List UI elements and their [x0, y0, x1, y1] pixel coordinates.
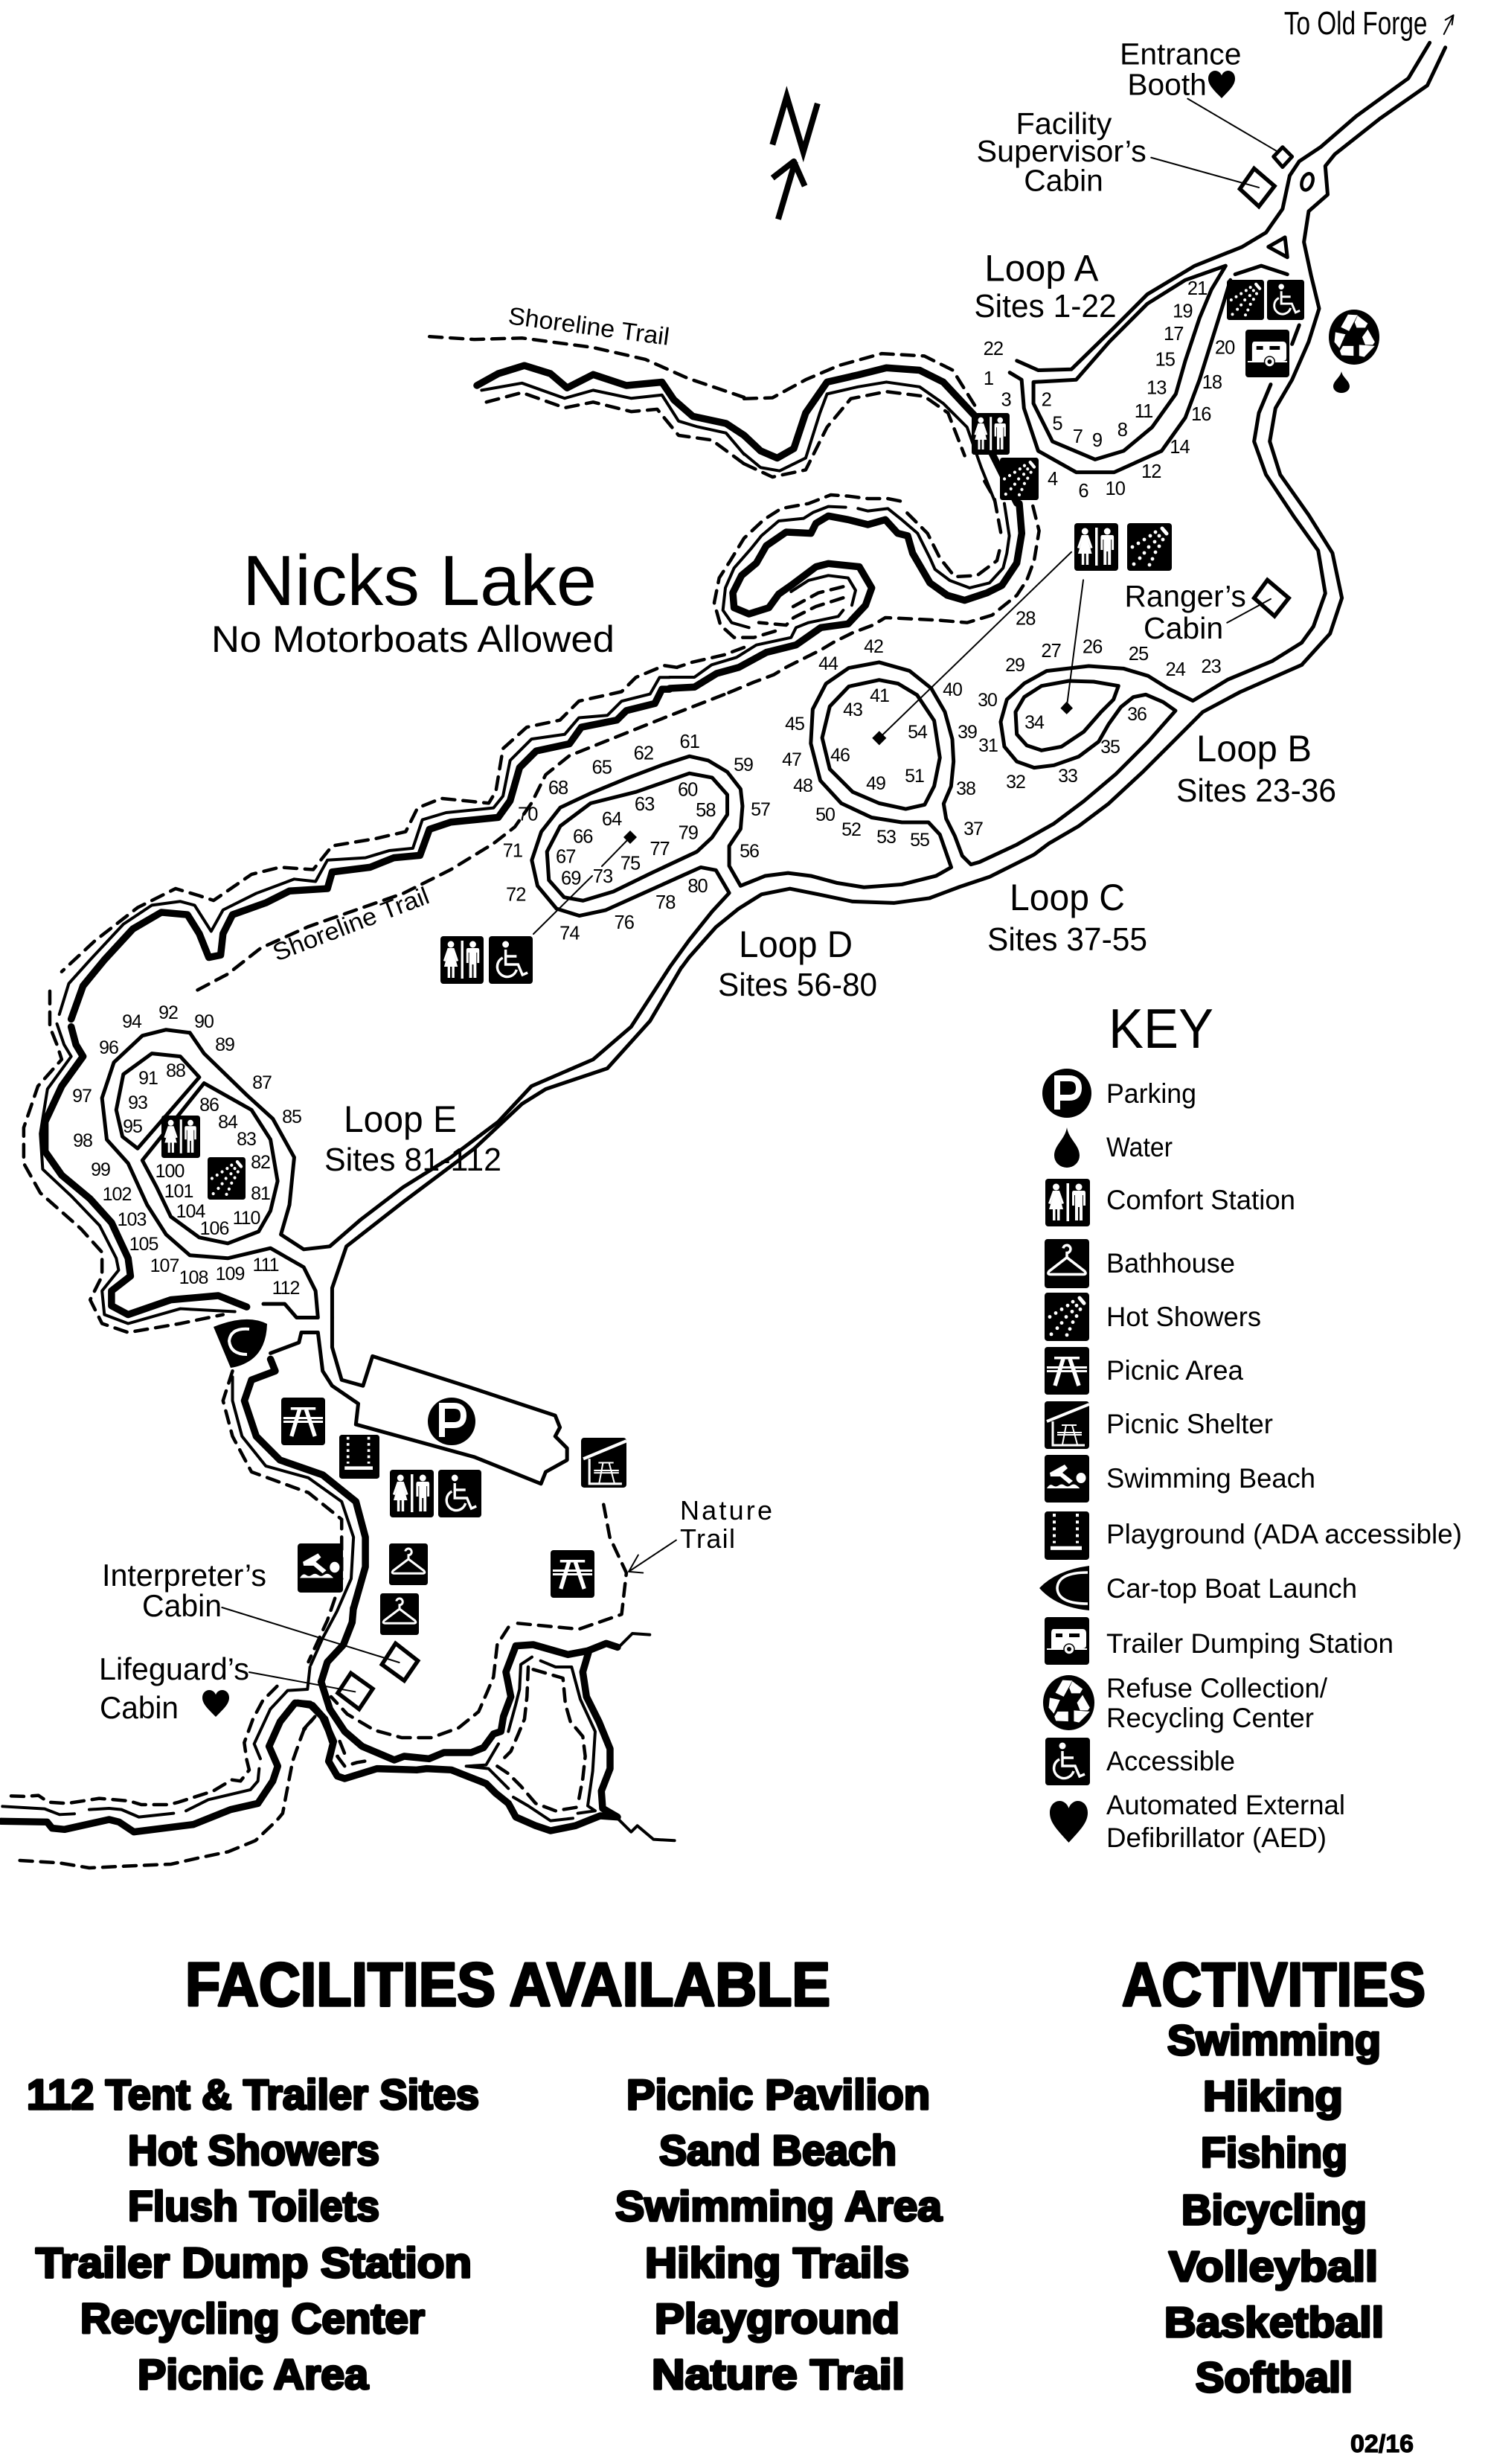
site numbers: Loops A, B and C north: 16	[1191, 404, 1211, 425]
subtitle: No Motorboats Allowed: No Motorboats Allowed	[211, 618, 615, 660]
site numbers: Loop D: 76	[614, 912, 635, 933]
list: activities: Fishing	[1201, 2129, 1347, 2177]
label: Sites 81-112: Sites 81-112	[324, 1142, 501, 1178]
compass: north arrow	[772, 96, 818, 220]
site numbers: Loops A, B and C north: 17	[1164, 324, 1183, 345]
label: Loop E: Loop E	[344, 1098, 457, 1140]
site numbers: Loops B and C: 55	[910, 830, 929, 851]
list: activities: Volleyball	[1169, 2243, 1378, 2291]
site numbers: Loop E: 112	[272, 1278, 300, 1299]
icon: entrance booth AED heart	[1208, 71, 1235, 98]
site numbers: Loops A, B and C north: 2	[1042, 390, 1051, 411]
key item: Picnic Shelter: Picnic Shelter	[1106, 1409, 1273, 1439]
site numbers: Loop E: 89	[215, 1034, 234, 1055]
icon: bathhouse south	[380, 1593, 419, 1635]
site numbers: Loops B and C: 56	[740, 841, 759, 862]
site numbers: Loop E: 84	[218, 1112, 238, 1133]
key item: Comfort Station	[1045, 1179, 1295, 1226]
site numbers: Loop D: 74	[559, 924, 580, 944]
site numbers: Loop E: 99	[91, 1159, 110, 1180]
site numbers: Loop E: 87	[252, 1072, 272, 1093]
site numbers: Loops A, B and C north: 3	[1001, 390, 1011, 411]
site numbers: Loop E: 102	[103, 1184, 131, 1205]
site numbers: Loop D: 61	[679, 732, 699, 752]
key item: Parking	[1042, 1069, 1196, 1118]
list: activities: Bicycling	[1181, 2186, 1367, 2234]
list: facilities column two: Nature Trail	[652, 2351, 905, 2399]
site numbers: Loop D: 63	[635, 794, 655, 815]
key item: Trailer Dumping Station	[1045, 1617, 1394, 1665]
key item: AED: Defibrillator (AED)	[1106, 1823, 1327, 1853]
key item: Bathhouse: Bathhouse	[1106, 1248, 1235, 1279]
list: activities: Hiking	[1203, 2073, 1343, 2120]
icon: parking	[428, 1398, 475, 1445]
icon: lifeguard cabin AED heart	[202, 1690, 229, 1717]
site numbers: Loops B and C: 36	[1127, 704, 1147, 725]
key item: Parking: Parking	[1106, 1078, 1196, 1109]
icon: Loop E comfort station	[161, 1116, 200, 1158]
site numbers: Loops B and C: 48	[793, 775, 812, 796]
labels: north-east features: Loop A	[984, 248, 1099, 289]
site numbers: Loops B and C: 41	[870, 685, 889, 706]
site numbers: Loops A, B and C north: 13	[1147, 378, 1167, 399]
label: Interpreter's Cabin: Cabin	[142, 1588, 222, 1623]
label: Lifeguard's Cabin	[99, 1651, 249, 1725]
site numbers: Loops A, B and C north: 12	[1141, 461, 1161, 482]
site numbers: Loops A, B and C north: 28	[1016, 609, 1036, 630]
labels: north-east features: Entrance	[1120, 37, 1241, 71]
list: facilities column one: Trailer Dump Station	[36, 2239, 472, 2287]
heading: Facilities Available: FACILITIES AVAILABLE	[185, 1950, 830, 2019]
heading: KEY: KEY	[1109, 997, 1213, 1060]
icon: Loop B C hot showers	[1127, 523, 1172, 571]
site numbers: Loops A, B and C north: 27	[1041, 641, 1061, 662]
site numbers: Loops A, B and C north: 18	[1202, 372, 1222, 393]
site numbers: Loop D: 71	[503, 841, 522, 862]
site numbers: Loops B and C: 50	[815, 804, 835, 825]
list: facilities column one	[27, 2071, 479, 2399]
site numbers: Loops A, B and C north: 15	[1155, 349, 1176, 370]
site numbers: Loop D: 80	[687, 876, 708, 897]
icon: Loop A hot showers west	[1000, 458, 1039, 500]
panel: map key	[1039, 997, 1462, 1853]
site numbers: Loop E: 109	[216, 1264, 244, 1284]
site numbers: Loop D: 72	[506, 884, 526, 905]
site numbers: Loop E: 107	[150, 1255, 179, 1276]
list: activities: Swimming	[1167, 2017, 1381, 2064]
site numbers: Loops A, B and C north: 24	[1166, 659, 1186, 680]
site numbers: Loop D: 70	[518, 804, 538, 825]
site numbers: Loops A, B and C north	[984, 278, 1235, 680]
site numbers: Loops A, B and C north: 25	[1129, 644, 1149, 665]
key item: Water	[1054, 1127, 1173, 1168]
key item: Refuse Collection / Recycling Center	[1043, 1673, 1328, 1733]
label: Loop D: Loop D	[739, 924, 853, 965]
icon: bathhouse north	[389, 1543, 428, 1585]
site numbers: Loop D: 66	[573, 827, 593, 848]
site numbers: Loops B and C: 33	[1058, 766, 1077, 787]
label: Shoreline Trail lower: Shoreline Trail	[269, 881, 433, 967]
site numbers: Loop E: 96	[99, 1037, 118, 1058]
site numbers: Loop D: 73	[593, 866, 613, 887]
icon: Loop B C comfort station	[1074, 523, 1118, 571]
labels: north-east features: To Old Forge	[1284, 6, 1427, 42]
icon: picnic shelter	[581, 1438, 626, 1488]
site numbers: Loop D: 60	[678, 779, 698, 800]
site numbers: Loop D: 64	[602, 809, 622, 830]
site numbers: Loop D: 67	[556, 846, 575, 867]
key item: Bathhouse	[1045, 1239, 1235, 1288]
road: entrance road and Loop A	[1010, 42, 1446, 665]
label: Loop B: Loop B	[1196, 728, 1312, 769]
key item: AED: Automated External	[1106, 1790, 1345, 1820]
list: facilities column two: Picnic Pavilion	[626, 2071, 930, 2119]
site numbers: Loop D: 79	[679, 822, 698, 843]
site numbers: Loop E: 103	[118, 1209, 146, 1230]
label: Lifeguard's Cabin: Cabin	[100, 1690, 179, 1725]
icon: Loop D accessible	[489, 936, 533, 984]
site numbers: Loops A, B and C north: 19	[1173, 301, 1193, 321]
site numbers: Loop E: 106	[200, 1218, 228, 1239]
icon: playground	[339, 1435, 379, 1479]
site numbers: Loops B and C	[734, 636, 1147, 862]
site numbers: Loops A, B and C north: 11	[1135, 401, 1152, 422]
site numbers: Loop E: 97	[72, 1086, 92, 1107]
site numbers: Loop E: 90	[194, 1011, 214, 1032]
label: Nature Trail	[680, 1495, 772, 1554]
site numbers: Loops B and C: 40	[943, 679, 962, 700]
label: Sites 23-36: Sites 23-36	[1176, 772, 1336, 809]
icon: Loop D comfort station	[440, 936, 484, 984]
site numbers: Loop D: 77	[650, 839, 670, 860]
label: Interpreter's Cabin	[102, 1558, 266, 1623]
site numbers: Loops B and C: 42	[864, 636, 883, 657]
key item: Trailer Dumping Station: Trailer Dumping Station	[1106, 1628, 1394, 1659]
label: Shoreline Trail upper: Shoreline Trail	[507, 301, 671, 351]
key item: Picnic Area	[1045, 1347, 1243, 1395]
shoreline of Nicks Lake	[1, 365, 1022, 1840]
site numbers: Loops A, B and C north: 21	[1187, 278, 1207, 299]
labels: north-east features	[872, 6, 1454, 745]
labels: north-east features: Supervisor’s	[977, 134, 1147, 168]
site numbers: Loop D: 65	[592, 757, 612, 778]
icon: trailer dump station	[1245, 330, 1289, 377]
site numbers: Loops A, B and C north: 8	[1117, 420, 1128, 441]
site numbers: Loops B and C: 35	[1100, 737, 1120, 758]
site numbers: Loops A, B and C north: 20	[1215, 338, 1235, 359]
site numbers: Loops A, B and C north: 6	[1078, 481, 1088, 502]
icon: Loop E hot showers	[208, 1157, 246, 1200]
site numbers: Loop E: 86	[199, 1095, 219, 1116]
site numbers: Loop E	[72, 1002, 301, 1299]
site numbers: Loops B and C: 49	[866, 773, 885, 794]
labels: north-east features: Cabin	[1024, 163, 1103, 197]
key item: Refuse Collection / Recycling Center: Recycling Center	[1106, 1703, 1314, 1733]
leaders: cabins and nature trail	[222, 1540, 676, 1709]
site numbers: Loop E: 81	[251, 1183, 270, 1204]
labels: north-east features: Booth	[1127, 68, 1207, 102]
title: Nicks Lake: Nicks Lake	[243, 541, 597, 621]
site numbers: Loop E: 104	[176, 1201, 205, 1222]
icon: Loop A accessible	[1267, 280, 1304, 320]
key item: AED	[1050, 1790, 1345, 1853]
leader: Loop D comfort station	[533, 831, 637, 934]
site numbers: Loops B and C: 46	[830, 745, 850, 766]
icon: Loop A comfort station	[972, 413, 1010, 455]
site numbers: Loop E: 92	[158, 1002, 178, 1023]
key item: Refuse Collection / Recycling Center: Refuse Collection/	[1106, 1673, 1328, 1703]
list: facilities column two	[615, 2071, 943, 2399]
road: Loop C and Loop D	[532, 662, 952, 967]
key item: Playground: Playground (ADA accessible)	[1106, 1519, 1462, 1549]
icon: recycling center	[1329, 310, 1379, 365]
site numbers: Loop E: 108	[179, 1267, 208, 1288]
site numbers: Loop E: 85	[282, 1107, 301, 1127]
label: Interpreter's Cabin: Interpreter’s	[102, 1558, 266, 1593]
site numbers: Loops A, B and C north: 9	[1092, 430, 1102, 451]
list: facilities column one: Flush Toilets	[128, 2183, 379, 2230]
key item: Picnic Shelter	[1045, 1401, 1273, 1449]
key item: Hot Showers: Hot Showers	[1106, 1302, 1261, 1332]
site numbers: Loops B and C: 51	[905, 766, 924, 787]
key item: Car-top Boat Launch	[1039, 1566, 1357, 1610]
list: facilities column one: Hot Showers	[128, 2127, 379, 2175]
list: facilities column two: Playground	[655, 2295, 899, 2343]
site numbers: Loops B and C: 34	[1024, 712, 1045, 733]
site numbers: Loops B and C: 31	[978, 735, 998, 756]
site numbers: Loop D: 58	[696, 800, 716, 821]
site numbers: Loops B and C: 54	[908, 722, 928, 743]
trail: Nature Trail and bottom trail	[20, 1505, 626, 1868]
label: Nature Trail: Nature	[680, 1495, 772, 1526]
list: facilities column two: Hiking Trails	[645, 2239, 909, 2287]
site numbers: Loop E: 105	[129, 1234, 158, 1255]
icon: Loop A hot showers	[1227, 280, 1264, 320]
site numbers: Loops A, B and C north: 5	[1052, 414, 1062, 435]
road: Loop E and parking lot	[102, 967, 682, 1484]
site numbers: Loop E: 93	[128, 1092, 147, 1113]
site numbers: Loops B and C: 45	[785, 714, 804, 735]
list: facilities column one: 112 Tent & Trailer Sites	[27, 2071, 479, 2119]
labels: north-east features: Ranger’s	[1125, 579, 1246, 613]
key item: Comfort Station: Comfort Station	[1106, 1185, 1295, 1215]
site numbers: Loop D: 62	[634, 743, 653, 764]
site numbers: Loop D: 68	[548, 778, 568, 799]
site numbers: Loops B and C: 59	[734, 755, 753, 775]
site numbers: Loop E: 111	[252, 1255, 279, 1276]
site numbers: Loop E: 88	[166, 1060, 185, 1081]
key item: Car-top Boat Launch: Car-top Boat Launch	[1106, 1573, 1357, 1604]
road: Loop B and Loop C east side	[930, 642, 1302, 898]
key item: Swimming Beach: Swimming Beach	[1106, 1463, 1315, 1494]
map: Nicks Lake campground	[1, 6, 1454, 1868]
list: facilities column one: Recycling Center	[80, 2295, 425, 2343]
site numbers: Loops B and C: 30	[978, 690, 997, 711]
labels: north-east features: Sites 1-22	[974, 289, 1117, 324]
site numbers: Loop D: 78	[655, 892, 676, 913]
site numbers: Loops B and C: 47	[782, 749, 801, 770]
site numbers: Loop E: 83	[237, 1129, 256, 1150]
site numbers: Loop E: 94	[122, 1011, 142, 1032]
site numbers: Loops B and C: 38	[956, 778, 975, 799]
icon: day use comfort station	[390, 1470, 434, 1517]
site numbers: Loop E: 100	[155, 1161, 184, 1182]
key item: Swimming Beach	[1045, 1455, 1315, 1503]
labels: north-east features: Cabin	[1144, 611, 1223, 645]
site numbers: Loops B and C: 39	[958, 722, 977, 743]
site numbers: Loop E: 101	[164, 1181, 193, 1202]
site numbers: Loops B and C: 44	[818, 653, 838, 674]
site numbers: Loops A, B and C north: 14	[1170, 437, 1190, 458]
site numbers: Loops A, B and C north: 22	[984, 339, 1003, 359]
site numbers: Loops B and C: 52	[841, 819, 861, 840]
site numbers: Loops B and C: 32	[1006, 772, 1025, 793]
list: activities: Softball	[1196, 2354, 1353, 2401]
label: Nature Trail: Trail	[680, 1523, 735, 1554]
list: activities: Basketball	[1164, 2299, 1384, 2346]
site numbers: Loop E: 110	[233, 1208, 260, 1229]
key item: Playground	[1045, 1511, 1462, 1560]
label: Sites 56-80: Sites 56-80	[718, 967, 877, 1003]
icon: car-top boat launch	[214, 1319, 267, 1368]
site numbers: Loops B and C: 43	[843, 700, 862, 720]
site numbers: Loop D	[503, 732, 716, 944]
site numbers: Loops A, B and C north: 10	[1106, 479, 1126, 499]
list: facilities column two: Sand Beach	[659, 2127, 897, 2175]
site numbers: Loop D: 75	[620, 853, 641, 874]
site numbers: Loops A, B and C north: 26	[1083, 636, 1103, 657]
site numbers: Loop E: 82	[251, 1152, 270, 1173]
site numbers: Loops B and C: 37	[963, 819, 983, 839]
icon: water drop	[1333, 371, 1350, 393]
label: Sites 37-55: Sites 37-55	[987, 921, 1147, 958]
key item: Picnic Area: Picnic Area	[1106, 1355, 1243, 1386]
key item: Water: Water	[1106, 1132, 1173, 1162]
site numbers: Loops A, B and C north: 7	[1073, 426, 1083, 447]
labels: north-east features: Facility	[1016, 106, 1112, 141]
heading: Activities: ACTIVITIES	[1122, 1950, 1426, 2019]
list: facilities column two: Swimming Area	[615, 2183, 943, 2230]
key item: Accessible: Accessible	[1106, 1746, 1235, 1776]
date code: 02/16	[1350, 2430, 1414, 2457]
site numbers: Loop D: 69	[561, 868, 581, 889]
key item: Hot Showers	[1045, 1293, 1261, 1341]
list: facilities column one: Picnic Area	[138, 2351, 369, 2399]
icon: picnic area west	[281, 1398, 325, 1445]
site numbers: Loops A, B and C north: 23	[1201, 656, 1222, 677]
site numbers: Loops B and C: 53	[876, 827, 896, 848]
site numbers: Loops A, B and C north: 4	[1048, 469, 1058, 490]
site numbers: Loop E: 98	[73, 1130, 92, 1151]
trail: Shoreline Trail upper and lower	[194, 336, 1039, 991]
site numbers: Loop E: 91	[138, 1068, 158, 1089]
icon: swimming beach	[298, 1543, 343, 1593]
key item: Accessible	[1045, 1738, 1235, 1785]
list: activities	[1164, 2017, 1384, 2401]
icon: day use accessible	[438, 1470, 481, 1517]
label: Loop C: Loop C	[1010, 877, 1125, 918]
label: Lifeguard's Cabin: Lifeguard’s	[99, 1651, 249, 1686]
site numbers: Loop E: 95	[123, 1116, 142, 1137]
site numbers: Loops B and C: 29	[1005, 655, 1024, 676]
site numbers: Loops A, B and C north: 1	[984, 368, 993, 389]
site numbers: Loops B and C: 57	[751, 799, 770, 820]
icon: picnic area east	[551, 1550, 594, 1598]
